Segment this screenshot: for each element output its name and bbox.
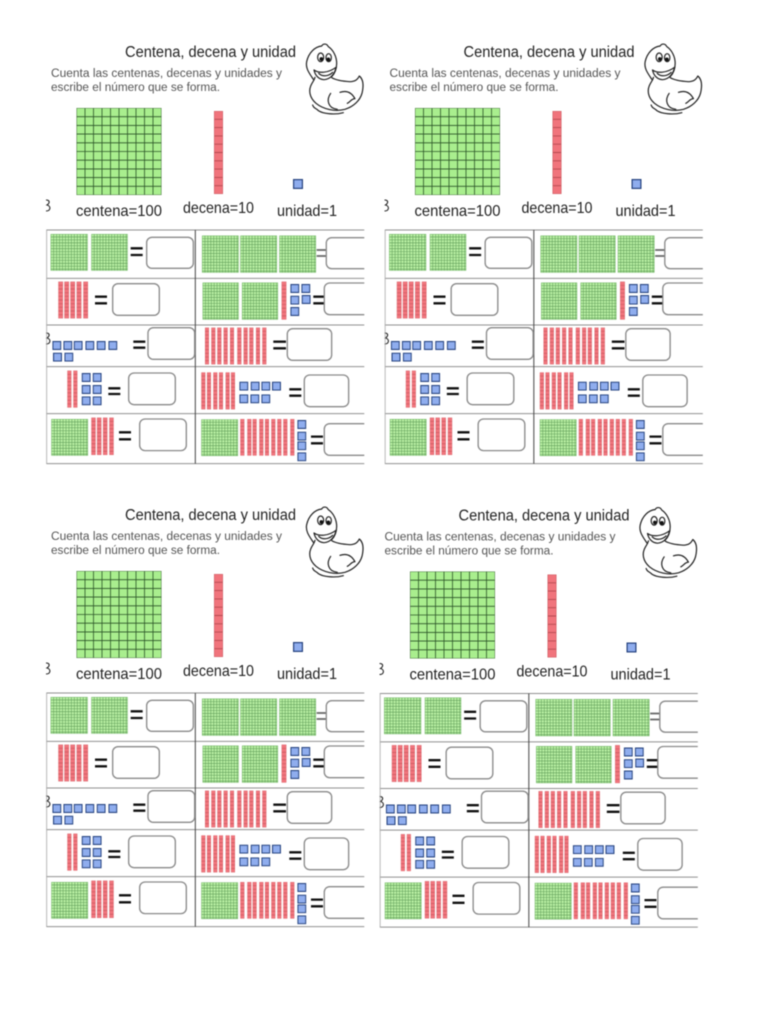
cell: eight units	[386, 791, 528, 825]
label: decena: decena=10	[183, 663, 254, 680]
label: decena: decena=10	[183, 200, 254, 217]
instructions line 2: escribe el número que se forma.	[390, 82, 558, 94]
cell: ten tens	[538, 791, 665, 828]
instructions line 2: escribe el número que se forma.	[51, 82, 220, 94]
cell: three hundreds	[535, 699, 713, 736]
cell: two hundreds one ten five units	[536, 745, 711, 783]
cell: ten tens	[205, 791, 332, 827]
label: unidad: unidad=1	[616, 203, 676, 220]
cell: six tens seven units	[201, 835, 349, 872]
cell: six tens seven units	[535, 836, 682, 873]
exercise table	[46, 693, 380, 927]
cell: five tens	[58, 282, 159, 318]
cell: one hundred nine tens four units	[535, 882, 711, 924]
label: decena: decena=10	[516, 664, 588, 680]
cell: two hundreds one ten five units	[203, 282, 378, 320]
instructions line 2: escribe el número que se forma.	[384, 546, 554, 558]
cell: two hundreds one ten five units	[203, 745, 378, 783]
base ten blocks key	[76, 571, 302, 658]
label: decena: decena=10	[522, 200, 593, 217]
cell: five tens	[397, 282, 498, 318]
cell: two tens six units	[401, 834, 509, 871]
cell: five tens	[392, 745, 493, 782]
cell: eight units	[391, 328, 533, 361]
cell: five tens	[58, 745, 159, 781]
stray mark	[380, 664, 383, 808]
label: unidad: unidad=1	[610, 666, 671, 684]
cell: ten tens	[543, 328, 670, 364]
cell: one hundred four tens	[51, 418, 186, 456]
base ten blocks key	[76, 108, 302, 195]
title: Centena, decena y unidad	[125, 44, 296, 61]
cell: one hundred nine tens four units	[201, 882, 378, 924]
worksheet: top left	[46, 44, 380, 464]
title: Centena, decena y unidad	[464, 44, 634, 61]
cell: six tens seven units	[540, 372, 687, 409]
cell: one hundred nine tens four units	[540, 419, 716, 461]
exercise table	[46, 230, 380, 464]
cell: two hundreds	[51, 697, 193, 734]
worksheet: bottom left	[46, 507, 380, 927]
cell: eight units	[53, 791, 195, 824]
stray mark	[384, 200, 388, 344]
instructions: Cuenta las centenas, decenas y unidades y	[384, 532, 616, 544]
icon: duck	[306, 507, 363, 577]
base ten blocks key	[415, 108, 641, 195]
label: centena: centena=100	[414, 203, 501, 220]
worksheet: bottom right	[380, 508, 713, 927]
cell: one hundred four tens	[51, 881, 186, 919]
cell: one hundred nine tens four units	[201, 419, 378, 461]
instructions line 2: escribe el número que se forma.	[51, 545, 220, 557]
icon: duck	[306, 44, 363, 114]
cell: six tens seven units	[201, 372, 349, 409]
icon: duck	[640, 508, 697, 577]
cell: two tens six units	[406, 371, 514, 408]
cell: one hundred four tens	[390, 418, 525, 456]
cell: three hundreds	[540, 236, 718, 273]
label: unidad: unidad=1	[277, 203, 337, 220]
base ten blocks key	[410, 572, 636, 658]
exercise table	[385, 230, 718, 464]
worksheet: top right	[384, 44, 718, 464]
label: unidad: unidad=1	[277, 666, 337, 683]
label: centena: centena=100	[76, 666, 162, 683]
cell: two hundreds one ten five units	[541, 282, 716, 320]
stray mark	[46, 200, 50, 344]
cell: two hundreds	[384, 697, 527, 734]
cell: one hundred four tens	[385, 881, 520, 919]
label: centena: centena=100	[76, 203, 162, 220]
cell: two tens six units	[67, 834, 175, 871]
instructions: Cuenta las centenas, decenas y unidades y	[51, 68, 282, 80]
exercise table	[380, 693, 713, 927]
cell: ten tens	[205, 328, 332, 364]
stray mark	[46, 663, 50, 807]
cell: three hundreds	[202, 236, 380, 273]
cell: eight units	[53, 328, 195, 361]
cell: three hundreds	[202, 699, 380, 736]
instructions: Cuenta las centenas, decenas y unidades y	[390, 68, 621, 80]
title: Centena, decena y unidad	[125, 507, 296, 524]
cell: two tens six units	[67, 371, 175, 408]
instructions: Cuenta las centenas, decenas y unidades y	[51, 531, 282, 543]
icon: duck	[645, 44, 702, 114]
cell: two hundreds	[51, 234, 193, 271]
cell: two hundreds	[389, 234, 532, 271]
title: Centena, decena y unidad	[458, 508, 630, 524]
label: centena: centena=100	[410, 666, 496, 684]
